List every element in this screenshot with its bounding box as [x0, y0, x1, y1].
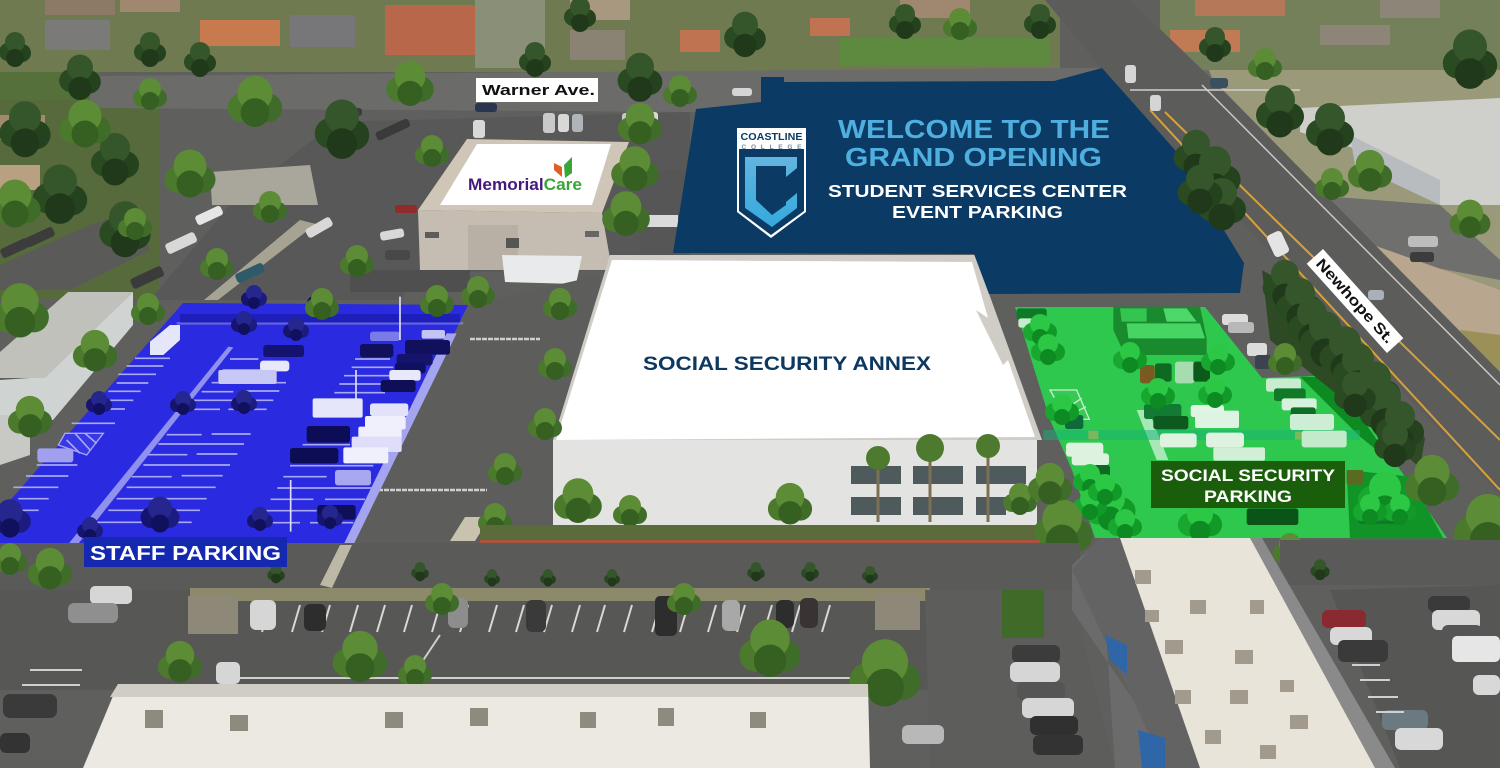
event parking navy banner [673, 68, 1244, 294]
parking lots north west [0, 112, 690, 300]
tree overlapping banner [1174, 130, 1246, 230]
label: Social Security Parking: SOCIAL SECURITY [1161, 467, 1335, 485]
trees north and west [0, 0, 1497, 565]
building: west [0, 292, 133, 465]
annex label: SOCIAL SECURITY ANNEX [643, 353, 931, 375]
logo: MemorialCare: MemorialCare [468, 175, 582, 194]
tent [502, 255, 582, 284]
cars in north west lots [0, 112, 658, 290]
label: Social Security Parking: PARKING [1204, 488, 1292, 506]
small street trees [267, 559, 1330, 586]
banner heading: WELCOME TO THE [838, 114, 1110, 144]
banner subheading: STUDENT SERVICES CENTER [828, 181, 1127, 201]
staff lot vehicles [37, 325, 450, 520]
south east building [1072, 538, 1395, 768]
vehicles on roads [340, 65, 1438, 300]
label: Newhope St. [1307, 249, 1403, 353]
Staff Parking zone [0, 285, 468, 545]
palm trees at annex [866, 434, 1000, 522]
logo: Coastline College shield: COASTLINE [740, 132, 803, 143]
staff lot trees [0, 285, 343, 541]
label: Warner Ave. [476, 78, 598, 102]
banner subheading line 2: EVENT PARKING [892, 202, 1063, 222]
landscaping strip at annex [480, 525, 1040, 543]
label: Social Security Parking [1151, 461, 1345, 508]
label: Newhope St.: Newhope St. [1312, 256, 1397, 347]
south parking lot [0, 545, 1070, 753]
Social Security Annex building [553, 255, 1042, 525]
south building [83, 684, 870, 768]
label: Warner Ave.: Warner Ave. [482, 82, 595, 99]
dark tree line along Newhope St [1262, 260, 1500, 558]
annex windows [851, 466, 1026, 515]
east side landscape and building [1160, 0, 1500, 390]
label: Staff Parking [84, 537, 287, 567]
logo: Coastline College shield [737, 128, 806, 238]
east-west drive [0, 543, 1080, 590]
Warner Ave road [90, 68, 1300, 115]
vehicles in lot beside green zone [1222, 314, 1271, 369]
building: MemorialCare [418, 139, 629, 270]
neighbourhood north of Warner Ave [0, 0, 1060, 300]
label: Staff Parking: STAFF PARKING [90, 543, 281, 565]
logo: MemorialCare [468, 157, 582, 194]
logo: Coastline College shield: COLLEGE [742, 144, 802, 151]
south east parking lot [1322, 585, 1500, 768]
Newhope St road [1045, 0, 1500, 495]
Social Security Parking zone [1015, 307, 1447, 542]
south east parking aisle [902, 590, 1115, 768]
south drive to right [1280, 540, 1500, 585]
banner heading line 2: GRAND OPENING [845, 142, 1102, 172]
south lot trees [0, 543, 1036, 706]
green lot trees [1023, 314, 1417, 542]
south lot vehicles [0, 586, 818, 753]
green lot vehicles [1017, 308, 1402, 525]
central lot [350, 275, 600, 545]
staff lot light poles [291, 297, 400, 532]
